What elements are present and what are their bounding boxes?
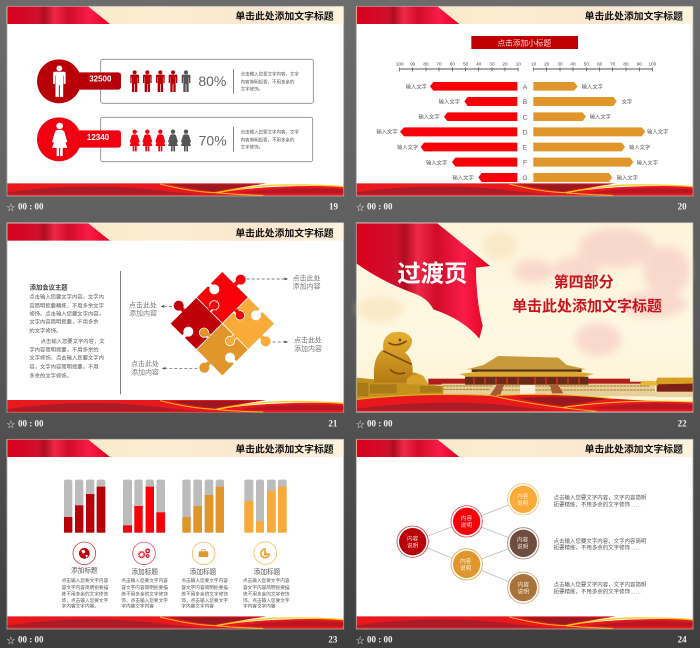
- callout labels: 点击此处: [131, 359, 159, 368]
- column text 4: 添加标题: [254, 567, 281, 576]
- callout labels: 点击此处: [294, 336, 322, 345]
- node: bottom right: 内容: [518, 580, 529, 588]
- node: upper middle: 内容: [461, 514, 472, 522]
- column text 2: 添加标题: [131, 567, 158, 576]
- arrow: top right callout: [247, 278, 287, 280]
- description 1: [554, 494, 647, 509]
- icon: star: ☆: [356, 203, 365, 213]
- column text 1: 饰，点击输入您要文字: [62, 597, 109, 604]
- category labels: E: [523, 145, 528, 152]
- value labels: 输入文字: [439, 97, 460, 105]
- category labels: A: [523, 84, 528, 91]
- value labels: 输入文字: [590, 113, 611, 121]
- value labels: [376, 82, 668, 182]
- chart axis: 40: [570, 61, 576, 66]
- statistic box: male: [37, 59, 313, 103]
- icon: star: ☆: [356, 636, 365, 646]
- description 3: 扼要精练，不用多余的文字修饰……: [554, 587, 641, 595]
- bar chart group 4: [244, 487, 287, 533]
- value labels: 输入文字: [376, 128, 398, 136]
- value labels: 输入文字: [406, 82, 427, 90]
- text block: 文字修饰。点击输入您要文字内: [29, 354, 104, 362]
- section titles: 单击此处添加文字标题: [512, 297, 662, 315]
- value labels: 输入文字: [418, 113, 440, 121]
- column text 3: [181, 567, 228, 610]
- puzzle graphic: [171, 272, 274, 375]
- callout labels: [129, 273, 322, 376]
- chart axis: 40: [476, 61, 482, 66]
- column text 3: 练不用多余的文字修饰: [181, 591, 228, 598]
- node: root: 说明: [407, 541, 419, 549]
- text block: 多余的文字修饰。: [29, 371, 72, 379]
- slide footer: timer: 00 : 00: [18, 418, 44, 428]
- heading: 单击此处添加文字标题: [235, 226, 334, 239]
- node: bottom right: 说明: [518, 587, 529, 595]
- slide number: 19: [329, 202, 338, 212]
- slide footer: timer: 00 : 00: [367, 635, 393, 645]
- description 3: [554, 580, 647, 595]
- column text 2: 练不用多余的文字修饰: [121, 591, 168, 598]
- column text 1: [62, 566, 109, 610]
- icon: pie: [254, 542, 277, 564]
- callout labels: 添加内容: [131, 367, 159, 376]
- panel: slide 22 transition page: [356, 223, 693, 429]
- chart axis: 20: [502, 61, 508, 66]
- chart axis: 80: [623, 61, 629, 66]
- slide number: 24: [678, 635, 687, 645]
- icon: star: ☆: [7, 636, 16, 646]
- statistic box: male: 80%: [198, 73, 226, 89]
- statistic box: male: 32500: [89, 75, 112, 84]
- statistic box: female: 12340: [87, 133, 110, 142]
- description 2: 扼要精练，不用多余的文字修饰……: [554, 544, 641, 552]
- icon: briefcase: [192, 542, 215, 565]
- chart axis: 60: [597, 61, 603, 66]
- section titles: [512, 273, 662, 315]
- bar chart group 2: [123, 487, 165, 533]
- node: top right: 说明: [517, 499, 529, 507]
- node: root: 内容: [407, 534, 419, 542]
- arrow: bottom left callout: [163, 367, 197, 369]
- column text 4: 练不用多余的文字修饰: [243, 591, 290, 598]
- text block: 容，文字内容简明扼要，不用: [29, 362, 99, 370]
- chart axis: 100: [396, 61, 404, 66]
- value labels: 输入文字: [397, 143, 418, 151]
- column text 2: 点击输入您要文字内容: [121, 577, 168, 584]
- column text 4: 点击输入您要文字内容: [243, 577, 290, 584]
- panel: slide 23 bar groups: [7, 439, 344, 646]
- heading: 单击此处添加文字标题: [235, 443, 334, 456]
- chart axis: 100: [648, 61, 657, 66]
- icon: star: ☆: [356, 419, 365, 429]
- column text 4: 字内容文字内容: [243, 603, 276, 610]
- chart axis: 30: [489, 61, 495, 66]
- callout labels: 点击此处: [129, 301, 157, 310]
- text block: [29, 283, 105, 379]
- chart axis: 90: [637, 61, 642, 66]
- column text 3: 添加标题: [190, 567, 217, 576]
- column text 3: 容文字内容简明扼要描: [181, 584, 228, 591]
- column text 3: 饰，点击输入您要文字: [181, 597, 228, 604]
- description 3: 点击输入您要文字内容，文字内容简明: [554, 580, 647, 588]
- chart subtitle: [471, 36, 578, 49]
- heading: 单击此处添加文字标题: [585, 10, 683, 23]
- chart subtitle: 点击添加小标题: [498, 37, 551, 47]
- value labels: 输入文字: [629, 143, 650, 151]
- node: root: [397, 526, 428, 557]
- arrow: left callout: [161, 305, 172, 307]
- node: bottom right: [508, 572, 539, 603]
- ground ribbon: [357, 394, 693, 412]
- node: lower middle: [451, 549, 482, 580]
- panel: slide 19 people statistics: [7, 6, 344, 213]
- ribbon label: 过渡页: [397, 261, 467, 287]
- node: top right: 内容: [517, 492, 529, 500]
- category labels: D: [523, 129, 528, 136]
- palace: [428, 356, 693, 397]
- node: middle right: 内容: [517, 536, 529, 544]
- callout labels: 添加内容: [293, 281, 321, 290]
- column text 2: [121, 567, 168, 610]
- callout labels: 添加内容: [294, 344, 322, 353]
- statistic box: male: 文字修饰。: [241, 86, 263, 93]
- chart axis: 60: [450, 61, 455, 66]
- statistic box: female: [37, 117, 313, 162]
- icon: gears: [133, 542, 155, 565]
- text block: 字内容简明扼要，不用多余的: [29, 345, 99, 353]
- column text 4: 容文字内容简明扼要描: [243, 584, 290, 591]
- node: upper middle: 说明: [461, 521, 472, 529]
- panel: slide 24 tree diagram: [356, 439, 693, 646]
- statistic box: female: 点击输入您要文字内容，文字: [241, 129, 299, 136]
- node: lower middle: 内容: [460, 557, 472, 565]
- category labels: G: [522, 175, 528, 182]
- value labels: 输入文字: [617, 174, 638, 182]
- column text 3: 字内容文字内容: [181, 603, 214, 610]
- description 2: 点击输入您要文字内容，文字内容简明: [554, 537, 647, 545]
- value labels: 输入文字: [637, 158, 658, 166]
- statistic box: male: 点击输入您要文字内容，文字: [241, 70, 299, 77]
- description 1: 扼要精练，不用多余的文字修饰……: [554, 501, 641, 509]
- chart axis: 10: [531, 61, 537, 66]
- chart axis: 50: [584, 61, 589, 66]
- callout labels: 添加内容: [129, 309, 157, 318]
- column text 2: 字内容文字内容: [121, 603, 154, 610]
- chart axis: 50: [463, 61, 469, 66]
- column text 4: [243, 567, 290, 610]
- chart axis: 20: [544, 61, 550, 66]
- heading: 单击此处添加文字标题: [585, 443, 683, 456]
- chart axis: [396, 61, 657, 71]
- text block: 容简明扼要精练，不用多余文字: [29, 301, 104, 309]
- text block: 点击输入您要文字内容，文: [41, 337, 105, 345]
- slide number: 20: [678, 202, 687, 212]
- node: lower middle: 说明: [460, 564, 472, 572]
- slide footer: timer: 00 : 00: [367, 418, 393, 428]
- text block: 文字内容简明扼要，不用多余: [29, 318, 99, 326]
- column text 1: 添加标题: [71, 566, 98, 575]
- slide footer: timer: 00 : 00: [18, 202, 44, 212]
- slide number: 21: [328, 418, 338, 428]
- slide footer: timer: 00 : 00: [18, 635, 44, 645]
- value labels: 输入文字: [582, 82, 603, 90]
- icon: star: ☆: [7, 203, 16, 213]
- ribbon: [357, 223, 490, 339]
- text block: 的文字修饰。: [29, 326, 61, 334]
- slide footer: timer: 00 : 00: [367, 202, 393, 212]
- text block: 添加会议主题: [30, 283, 68, 292]
- text block: 点击输入您要文字内容，文字内: [29, 293, 104, 301]
- heading: 单击此处添加文字标题: [235, 10, 334, 23]
- stone lion: [357, 332, 443, 400]
- chart axis: 70: [610, 61, 616, 66]
- statistic box: female: 文字修饰。: [241, 143, 263, 150]
- column text 1: 容文字内容简明扼要描: [62, 584, 109, 591]
- panel: slide 21 puzzle: [7, 223, 344, 429]
- chart axis: 10: [516, 61, 521, 66]
- column text 4: 饰，点击输入您要文字: [243, 597, 290, 604]
- value labels: 输入文字: [426, 158, 447, 166]
- text block: 修饰。点击输入您要文字内容，: [29, 309, 104, 317]
- bar chart tracks: [64, 480, 287, 533]
- chart axis: 70: [436, 61, 442, 66]
- column text 1: 练不用多余的文字修饰: [62, 591, 109, 598]
- column text 2: 容文字内容简明扼要描: [121, 584, 168, 591]
- category labels: C: [523, 114, 528, 121]
- statistic box: female: 70%: [199, 133, 227, 149]
- bar chart group 1: [64, 487, 105, 533]
- statistic box: male: 内容简明扼要，不用多余的: [241, 79, 295, 86]
- slide number: 22: [678, 418, 687, 428]
- column text 2: 饰，点击输入您要文字: [121, 597, 168, 604]
- column text 3: 点击输入您要文字内容: [181, 577, 228, 584]
- chart bars left: [400, 82, 517, 182]
- category labels: B: [523, 99, 528, 106]
- category labels: F: [523, 160, 527, 167]
- node: middle right: [508, 528, 539, 559]
- icon: globe: [73, 542, 96, 565]
- statistic box: female: 内容简明扼要，不用多余的: [241, 136, 295, 143]
- section titles: 第四部分: [554, 273, 614, 291]
- value labels: 输入文字: [647, 128, 668, 136]
- clouds: [513, 228, 690, 356]
- column text 1: 字内容文字内容。: [62, 603, 99, 610]
- connector lines: [413, 499, 523, 588]
- value labels: 输入文字: [452, 174, 474, 182]
- column text 1: 点击输入您要文字内容: [62, 577, 109, 584]
- node: top right: [508, 484, 539, 515]
- description 2: [554, 537, 647, 552]
- node: upper middle: [451, 506, 482, 537]
- bar chart group 3: [182, 487, 224, 533]
- value labels: 文字: [622, 97, 632, 105]
- arrow: right callout: [273, 341, 287, 343]
- slide number: 23: [328, 635, 338, 645]
- category labels: [522, 84, 528, 182]
- callout labels: 点击此处: [293, 273, 321, 282]
- node: middle right: 说明: [517, 543, 529, 551]
- chart axis: 80: [423, 61, 429, 66]
- chart bars right: [533, 82, 645, 182]
- icon: star: ☆: [7, 419, 16, 429]
- chart axis: 90: [410, 61, 416, 66]
- chart axis: 30: [557, 61, 563, 66]
- panel: slide 20 butterfly chart: [356, 6, 693, 213]
- description 1: 点击输入您要文字内容，文字内容简明: [554, 494, 647, 502]
